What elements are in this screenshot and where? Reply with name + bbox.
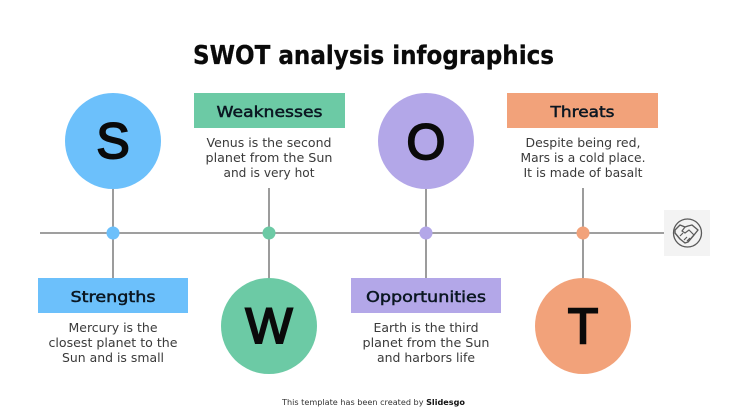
circle letter S: S [96,113,130,169]
text: weaknesses description: planet from the Sun [206,150,332,165]
circle letter W: W [245,298,293,354]
heading box: Opportunities: Opportunities [366,288,486,306]
timeline dot: opportunities [420,226,432,240]
timeline dot: threats [576,226,590,240]
text: opportunities description: planet from the Sun [362,335,490,350]
circle letter S [65,93,161,189]
title: SWOT analysis infographics [193,41,554,71]
text: opportunities description: and harbors life [377,350,475,365]
text: weaknesses description: Venus is the second [206,135,332,150]
heading box: Threats [507,93,658,128]
heading box: Threats: Threats [549,103,614,121]
timeline axis [40,185,664,280]
timeline dot: weaknesses [262,226,276,240]
heading box: Weaknesses [194,93,345,128]
panel: weaknesses [194,93,345,374]
heading box: Strengths [38,278,188,313]
timeline dot: strengths [106,226,120,240]
text: strengths description [48,320,178,365]
text: weaknesses description: and is very hot [224,165,315,180]
circle letter T: T [568,298,598,354]
text: threats description [520,135,646,180]
circle letter W [221,278,317,374]
text: opportunities description [362,320,490,365]
icon: handshake [664,210,710,256]
text: strengths description: Sun and is small [62,350,164,365]
panel: threats [507,93,658,374]
heading box: Opportunities [351,278,501,313]
text: strengths description: closest planet to the [48,335,178,350]
panel: opportunities [351,93,501,365]
text: opportunities description: Earth is the third [374,320,478,335]
panel: strengths [38,93,188,365]
text: threats description: It is made of basalt [524,165,643,180]
text: threats description: Despite being red, [526,135,640,150]
heading box: Strengths: Strengths [70,288,156,306]
circle letter O: O [407,114,445,170]
text: weaknesses description [206,135,332,180]
text: strengths description: Mercury is the [68,320,158,335]
circle letter O [378,93,474,189]
circle letter T [535,278,631,374]
text: threats description: Mars is a cold place. [520,150,646,165]
heading box: Weaknesses: Weaknesses [216,103,322,121]
footer credit: This template has been created by Slidesgo [281,398,465,407]
